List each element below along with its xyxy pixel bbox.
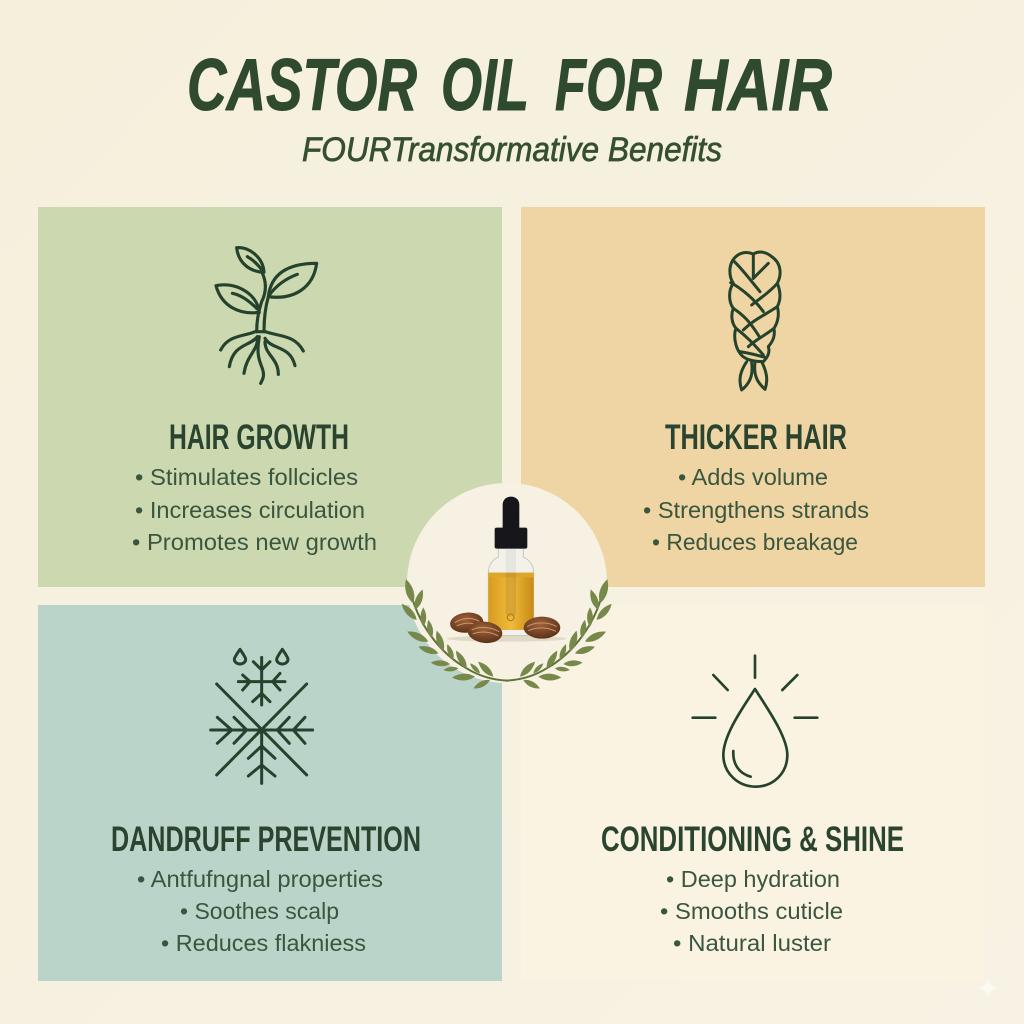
bullet list: thicker hair: • Strengthens strands xyxy=(643,497,869,523)
bullet list: dandruff prevention xyxy=(137,866,383,956)
title xyxy=(187,45,832,126)
bottle and seeds xyxy=(447,497,567,645)
bullet list: hair growth xyxy=(132,464,377,555)
icon: sparkle xyxy=(977,977,999,999)
bullet list: hair growth: • Stimulates follcicles xyxy=(135,464,358,490)
heading: dandruff prevention: DANDRUFF PREVENTION xyxy=(111,820,421,859)
title: FOR xyxy=(555,45,662,126)
bullet list: hair growth: • Promotes new growth xyxy=(132,529,377,555)
bullet list: conditioning and shine: • Natural luster xyxy=(673,930,831,956)
wreath right branch xyxy=(506,578,614,691)
subtitle: FOURTransformative Benefits xyxy=(302,131,722,169)
wreath left branch xyxy=(399,578,507,691)
bullet list: dandruff prevention: • Reduces flakniess xyxy=(161,930,366,956)
heading: hair growth: HAIR GROWTH xyxy=(169,418,349,457)
heading: thicker hair: THICKER HAIR xyxy=(665,418,847,457)
icon: shining oil drop xyxy=(693,656,817,787)
laurel wreath xyxy=(399,578,614,691)
bullet list: thicker hair: • Reduces breakage xyxy=(652,529,858,555)
panel: hair growth xyxy=(38,207,502,587)
icon: snowflake with drops xyxy=(211,649,313,783)
icon: dropper bottle xyxy=(488,497,534,636)
center medallion xyxy=(399,483,614,691)
icon: sprout with roots xyxy=(216,248,317,383)
bullet list: dandruff prevention: • Soothes scalp xyxy=(180,898,339,924)
panel: dandruff prevention xyxy=(38,605,502,981)
panel: thicker hair xyxy=(521,207,985,587)
heading: conditioning and shine: CONDITIONING & SHINE xyxy=(601,820,904,859)
seeds xyxy=(447,611,567,645)
bullet list: dandruff prevention: • Antfufngnal properties xyxy=(137,866,383,892)
bullet list: conditioning and shine: • Smooths cuticle xyxy=(660,898,843,924)
bullet list: thicker hair: • Adds volume xyxy=(678,464,828,490)
title: CASTOR xyxy=(187,45,417,126)
panel: conditioning and shine xyxy=(521,605,985,981)
bullet list: hair growth: • Increases circulation xyxy=(135,497,365,523)
title: OIL xyxy=(441,45,529,126)
bullet list: conditioning and shine: • Deep hydration xyxy=(666,866,840,892)
title: HAIR xyxy=(684,45,832,126)
bullet list: thicker hair xyxy=(643,464,869,555)
icon: braid xyxy=(730,252,780,390)
bullet list: conditioning and shine xyxy=(660,866,843,956)
